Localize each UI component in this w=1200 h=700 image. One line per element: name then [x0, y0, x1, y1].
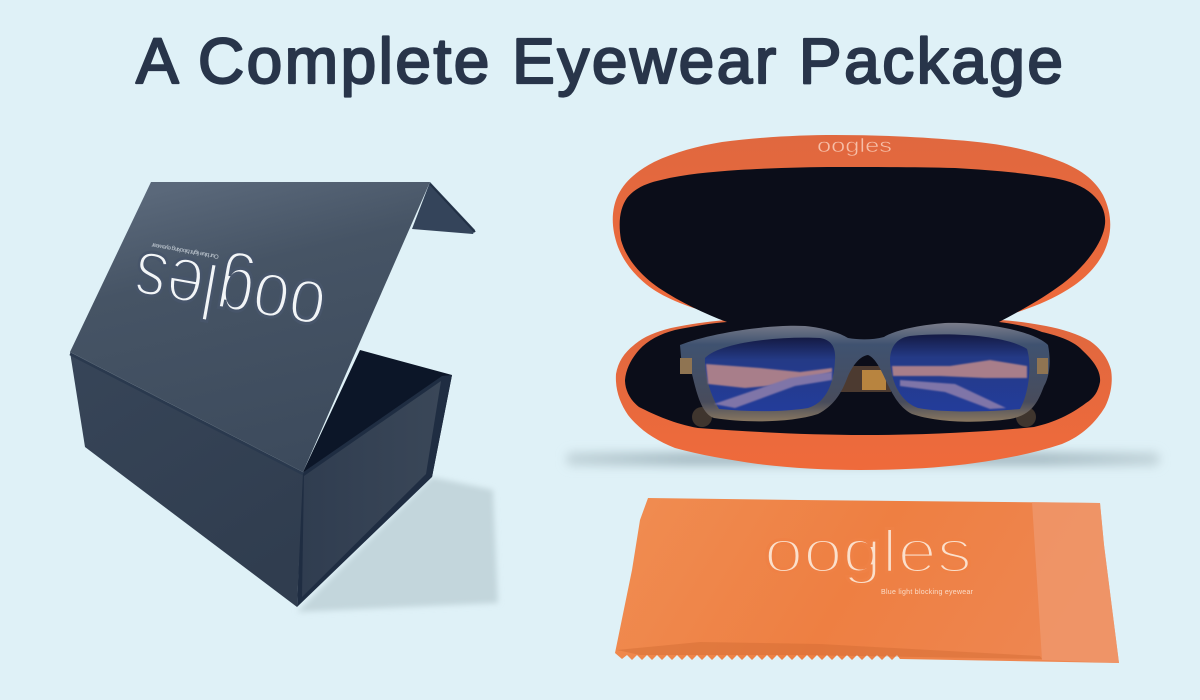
gift box — [70, 182, 498, 612]
eyeglass case — [566, 135, 1160, 470]
temple reflections — [706, 364, 832, 388]
lid hinge flap — [412, 182, 475, 234]
cloth logo: oogles — [764, 518, 972, 585]
temple arms behind — [835, 366, 891, 392]
case upper shell — [613, 135, 1110, 317]
cloth bottom fold — [617, 642, 1042, 659]
title: A Complete Eyewear Package — [136, 25, 1063, 97]
box lid — [70, 182, 430, 472]
box front face — [70, 352, 303, 607]
frame — [680, 323, 1050, 422]
lid edge — [70, 354, 303, 474]
case lower shell — [616, 320, 1112, 470]
cloth tagline: Blue light blocking eyewear — [881, 589, 974, 596]
glasses — [680, 323, 1050, 427]
box interior — [303, 350, 452, 477]
box right side — [297, 375, 452, 607]
box shadow — [297, 477, 498, 612]
right lens — [890, 334, 1029, 412]
case lining — [620, 167, 1105, 435]
left lens — [705, 338, 835, 411]
case shadow — [566, 452, 1160, 466]
box tagline: Our blue light blocking eyewear — [151, 241, 219, 259]
box logo: oogles — [126, 234, 332, 355]
hinge details — [680, 358, 692, 374]
cloth body — [615, 498, 1119, 663]
cleaning cloth — [615, 498, 1119, 663]
cloth folded strip — [1032, 502, 1119, 663]
case logo: oogles — [817, 136, 892, 157]
